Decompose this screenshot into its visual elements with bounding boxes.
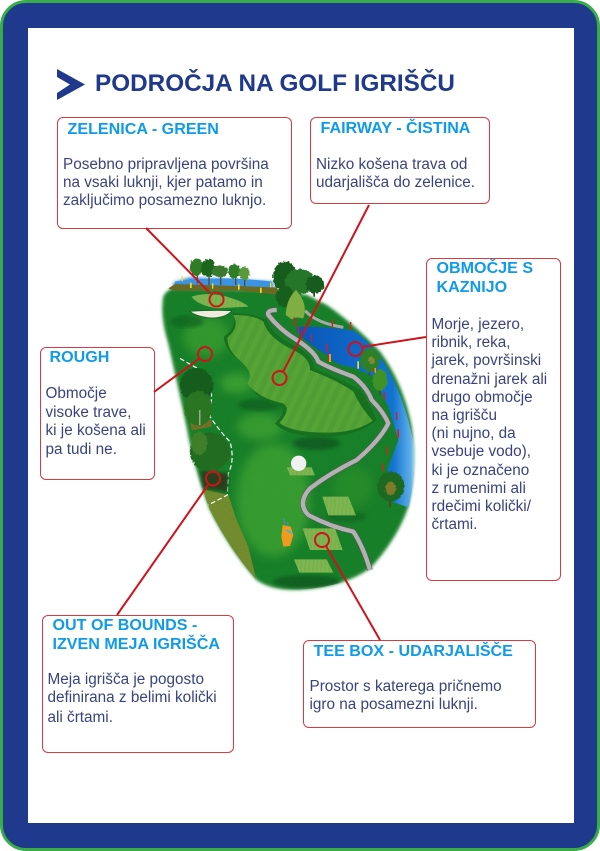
text: zelenica bbox=[63, 156, 269, 209]
fairway bbox=[227, 315, 373, 433]
text: območje s kaznijo: ribnik, reka, bbox=[432, 334, 511, 351]
text: out of bounds: Meja igrišča je pogosto bbox=[48, 671, 204, 688]
panel: fairway bbox=[310, 117, 490, 204]
heading: fairway: FAIRWAY - ČISTINA bbox=[320, 118, 470, 136]
golf course illustration bbox=[157, 259, 420, 593]
heading: območje s kaznijo bbox=[436, 258, 533, 296]
text: rough: visoke trave, bbox=[46, 404, 131, 421]
water behind the course bbox=[173, 277, 273, 290]
golf ball bbox=[291, 456, 306, 471]
heading: out of bounds bbox=[52, 616, 220, 653]
hazard stakes bbox=[294, 317, 399, 471]
text: zelenica: Posebno pripravljena površina bbox=[63, 156, 269, 172]
golf bag bbox=[281, 518, 293, 547]
text: območje s kaznijo: na igrišču bbox=[432, 407, 497, 424]
rough edge bbox=[200, 488, 257, 582]
text: fairway: udarjališča do zelenice. bbox=[316, 174, 475, 191]
course ground bbox=[162, 288, 414, 590]
callout line: zelenica bbox=[146, 228, 224, 306]
heading: zelenica: ZELENICA - GREEN bbox=[68, 120, 219, 138]
trees by the lake bbox=[360, 348, 404, 507]
mound shadows bbox=[293, 437, 340, 450]
text: območje s kaznijo: rdečimi količki/ bbox=[432, 498, 531, 515]
back tree line bbox=[190, 259, 250, 287]
text: območje s kaznijo: črtami. bbox=[432, 516, 477, 533]
callout line: območje s kaznijo bbox=[348, 337, 426, 356]
callout line: tee box bbox=[315, 533, 380, 640]
lighter grass glow bbox=[157, 283, 420, 593]
heading: tee box: TEE BOX - UDARJALIŠČE bbox=[314, 642, 513, 660]
green bbox=[192, 294, 248, 308]
text: območje s kaznijo: drugo območje bbox=[432, 389, 533, 406]
left trees bbox=[180, 368, 230, 492]
bunker bbox=[190, 310, 232, 318]
text: rough bbox=[46, 385, 146, 458]
heading: rough: ROUGH bbox=[50, 348, 109, 366]
text: območje s kaznijo: Morje, jezero, bbox=[432, 316, 524, 333]
text: območje s kaznijo bbox=[431, 316, 547, 533]
grain texture bbox=[157, 283, 420, 593]
icon: title chevron bbox=[57, 69, 85, 100]
panel: tee box bbox=[303, 640, 536, 728]
text: tee box: Prostor s katerega pričnemo bbox=[310, 678, 502, 695]
big tree cluster bbox=[273, 261, 324, 319]
text: tee box bbox=[310, 678, 502, 713]
tee boxes bbox=[287, 467, 315, 475]
text: rough: pa tudi ne. bbox=[46, 441, 117, 458]
heading: območje s kaznijo: KAZNIJO bbox=[436, 278, 507, 296]
callout line: rough bbox=[154, 347, 212, 392]
text: območje s kaznijo: z rumenimi ali bbox=[432, 480, 526, 497]
text: out of bounds bbox=[48, 671, 217, 726]
back bank bbox=[168, 284, 280, 295]
text: zelenica: zaključimo posamezno luknjo. bbox=[63, 192, 266, 209]
back water strip bbox=[175, 278, 272, 287]
panel: out of bounds bbox=[42, 615, 234, 753]
text: rough: Območje bbox=[46, 385, 107, 402]
text: out of bounds: definirana z belimi količki bbox=[48, 689, 217, 706]
text: fairway: Nizko košena trava od bbox=[316, 156, 467, 172]
callout line: out of bounds bbox=[117, 472, 220, 615]
text: rough: ki je košena ali bbox=[46, 422, 146, 439]
fairway dark rim bbox=[224, 313, 377, 437]
text: območje s kaznijo: (ni nujno, da bbox=[432, 425, 516, 442]
panel: rough bbox=[40, 347, 155, 480]
out of bounds dashes bbox=[180, 358, 232, 505]
heading: out of bounds: IZVEN MEJA IGRIŠČA bbox=[52, 635, 220, 653]
text: območje s kaznijo: drenažni jarek ali bbox=[432, 371, 547, 388]
lake bbox=[297, 327, 414, 507]
text: tee box: igro na posamezni luknji. bbox=[310, 696, 478, 713]
text: območje s kaznijo: ki je označeno bbox=[432, 462, 529, 479]
panel: zelenica - green bbox=[57, 117, 292, 229]
heading: območje s kaznijo: OBMOČJE S bbox=[436, 258, 533, 276]
callout line: fairway bbox=[272, 205, 369, 385]
title: PODROČJA NA GOLF IGRIŠČU bbox=[95, 70, 455, 96]
panel: območje s kaznijo bbox=[426, 258, 561, 581]
text: območje s kaznijo: jarek, površinski bbox=[432, 352, 541, 369]
text: območje s kaznijo: vsebuje vodo), bbox=[432, 443, 531, 460]
cart path bbox=[268, 310, 388, 570]
heading: out of bounds: OUT OF BOUNDS - bbox=[52, 616, 197, 634]
text: out of bounds: ali črtami. bbox=[48, 709, 113, 726]
yellow stakes bbox=[182, 276, 376, 373]
text: fairway bbox=[316, 156, 475, 191]
text: zelenica: na vsaki luknji, kjer patamo in bbox=[63, 174, 263, 191]
